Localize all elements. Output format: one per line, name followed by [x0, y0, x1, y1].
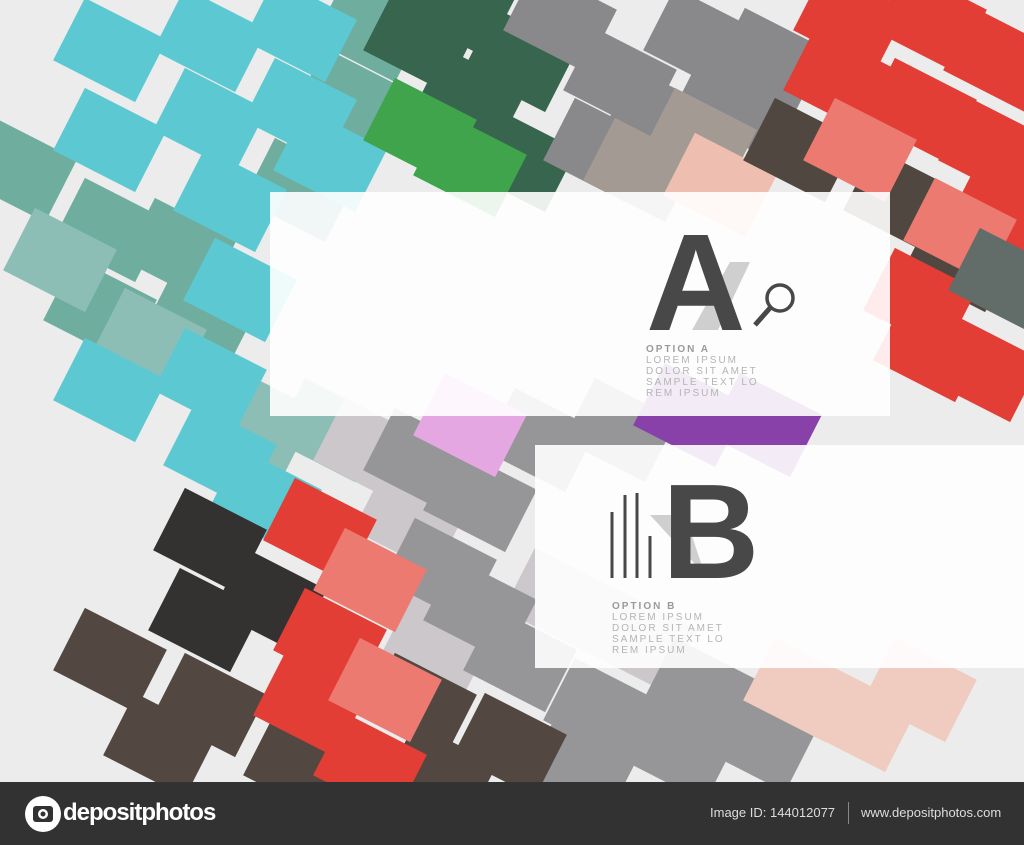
logo: depositphotos [63, 799, 215, 826]
text B: REM IPSUM [612, 645, 687, 656]
text B: OPTION B [612, 601, 676, 612]
text A: OPTION A [646, 344, 710, 355]
url: www.depositphotos.com [861, 805, 1001, 820]
text A: SAMPLE TEXT LO [646, 377, 759, 388]
text B: SAMPLE TEXT LO [612, 634, 725, 645]
panel B [535, 445, 1024, 668]
text A: DOLOR SIT AMET [646, 366, 758, 377]
text B: DOLOR SIT AMET [612, 623, 724, 634]
panel A [270, 192, 890, 416]
bars icon and letter B [610, 475, 760, 585]
text A [646, 344, 759, 399]
letter A with magnifier icon [646, 212, 795, 337]
text A: REM IPSUM [646, 388, 721, 399]
text B: LOREM IPSUM [612, 612, 704, 623]
text B [612, 601, 725, 656]
image id: Image ID: 144012077 [710, 805, 835, 820]
text A: LOREM IPSUM [646, 355, 738, 366]
logo [25, 796, 216, 832]
footer [0, 782, 1024, 845]
